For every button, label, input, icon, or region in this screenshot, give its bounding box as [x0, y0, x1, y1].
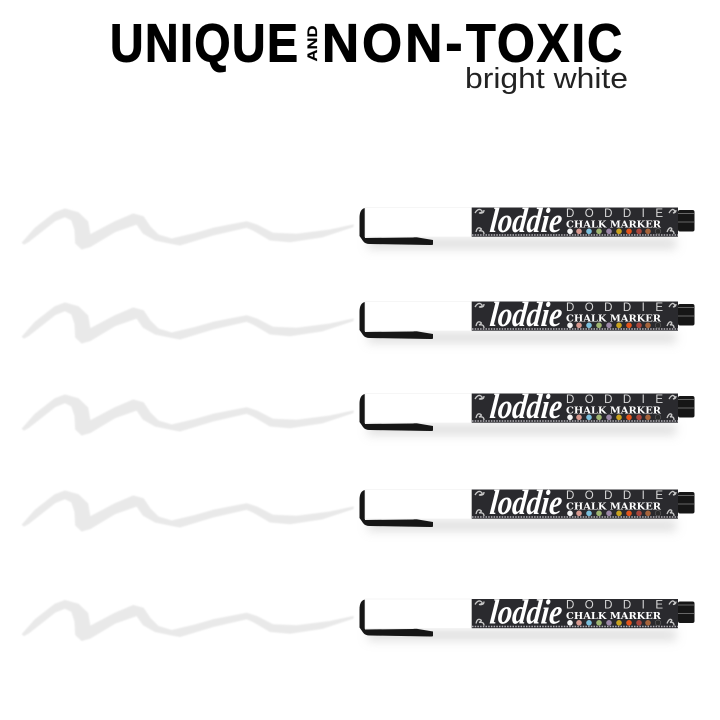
marker 1: loddie [488, 201, 564, 240]
label ornaments [475, 395, 676, 420]
row 3: stroke and marker [22, 387, 695, 435]
chalk stroke 1 [22, 209, 353, 249]
title: TOXIC [466, 12, 624, 73]
title: UNIQUE [110, 12, 299, 73]
marker 3: DODDIE [566, 394, 663, 406]
marker 2: DODDIE [566, 302, 663, 314]
marker 4 [360, 483, 694, 531]
marker 3: loddie [488, 387, 564, 426]
label ornaments [475, 209, 676, 234]
marker 5: loddie [488, 593, 564, 631]
marker 4: CHALK MARKER [566, 502, 662, 512]
row 1: stroke and marker [22, 201, 695, 249]
chalk stroke 4 [22, 491, 353, 531]
subtitle: bright white: bright white [465, 63, 628, 95]
row 2: stroke and marker [22, 295, 695, 343]
label ornaments [475, 491, 676, 516]
marker 2 [360, 295, 694, 343]
label ornaments [475, 601, 676, 626]
marker 5: CHALK MARKER [566, 612, 662, 622]
chalk stroke 3 [22, 395, 353, 435]
chalk stroke 5 [22, 600, 353, 640]
marker 5 [360, 593, 694, 640]
chalk stroke 2 [22, 303, 353, 343]
marker 1: CHALK MARKER [566, 220, 662, 230]
marker 3 [360, 387, 694, 435]
title: NON- [322, 13, 466, 74]
marker 1: DODDIE [566, 208, 663, 220]
marker 4: loddie [488, 483, 564, 522]
marker 2: loddie [488, 295, 564, 334]
marker 2: CHALK MARKER [566, 314, 662, 324]
row 5: stroke and marker [22, 593, 695, 640]
row 4: stroke and marker [22, 483, 695, 531]
marker 5: DODDIE [566, 600, 663, 612]
title: AND [304, 26, 320, 62]
marker 4: DODDIE [566, 490, 663, 502]
marker 1 [360, 201, 694, 249]
label ornaments [475, 303, 676, 328]
title [110, 12, 624, 74]
marker 3: CHALK MARKER [566, 406, 662, 416]
